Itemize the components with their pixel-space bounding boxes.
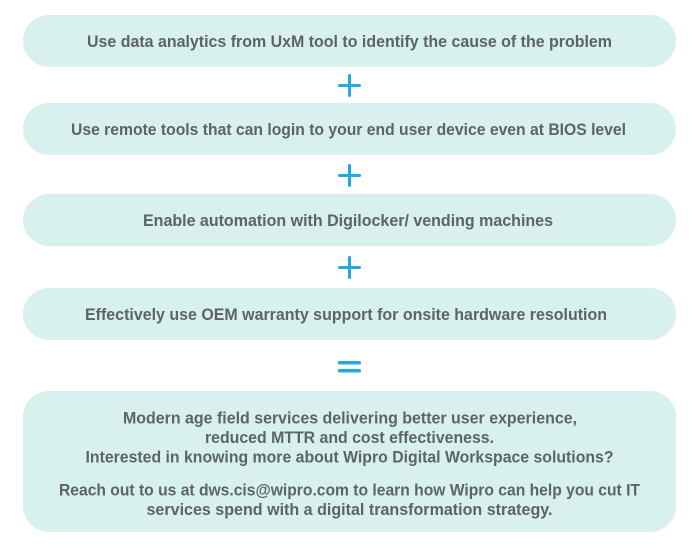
panel: automation: Enable automation with Digilocker/ vending machines: [143, 212, 553, 230]
text block: outcome: Interested in knowing more about Wipro Digital Workspace solutions?: [86, 448, 614, 466]
text block: outcome: Modern age field services delivering better user experience,: [123, 410, 577, 428]
text block: contact: services spend with a digital transformation strategy.: [146, 501, 552, 519]
panel: automation: [23, 194, 676, 246]
text block: outcome: reduced MTTR and cost effectiveness.: [205, 429, 494, 447]
icon: plus 1: [338, 74, 361, 97]
panel: OEM warranty: [23, 288, 676, 340]
icon: equals: [338, 361, 361, 372]
panel: OEM warranty: Effectively use OEM warranty support for onsite hardware resolution: [85, 306, 607, 324]
panel: remote tools: Use remote tools that can login to your end user device even at BIOS level: [71, 121, 626, 139]
text block: contact: Reach out to us at dws.cis@wipro.com to learn how Wipro can help you cut IT: [59, 482, 640, 500]
text block: outcome: [86, 410, 614, 466]
icon: plus 2: [338, 164, 361, 187]
panel: data analytics: [23, 15, 676, 67]
panel: data analytics: Use data analytics from UxM tool to identify the cause of the problem: [87, 33, 612, 51]
text block: contact: [59, 482, 640, 519]
panel: remote tools: [23, 103, 676, 155]
panel: result and call to action: [23, 391, 676, 532]
icon: plus 3: [338, 256, 361, 279]
